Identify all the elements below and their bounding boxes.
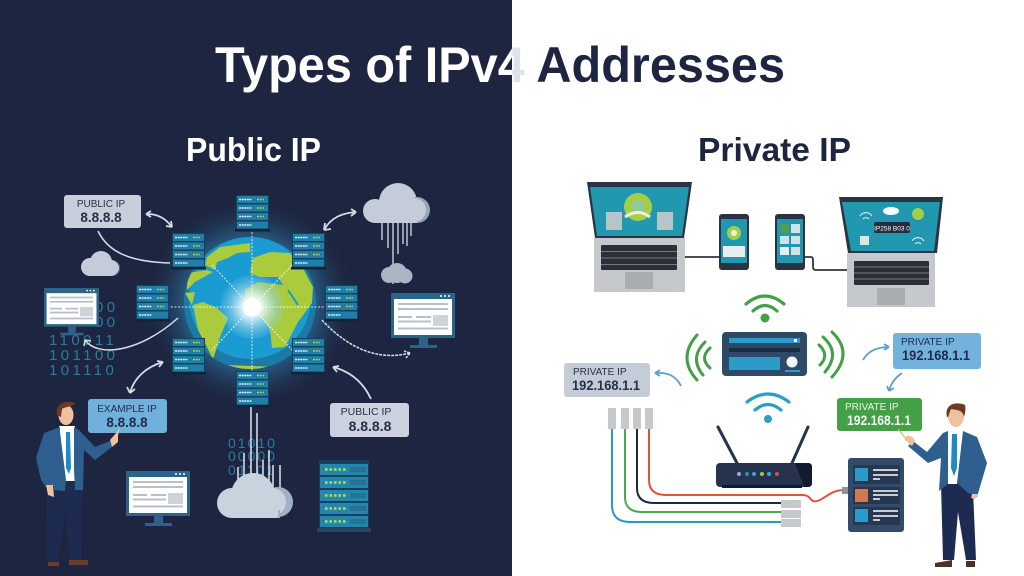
icon: green wifi top (746, 296, 784, 322)
arrow to left callout (655, 370, 681, 386)
callout: public IP lower right: 8.8.8.8 (349, 418, 392, 434)
cable laptop to phone (685, 256, 719, 258)
callout: private IP green: 192.168.1.1 (847, 413, 911, 428)
right panel background (512, 0, 1024, 576)
icon: green signal right (819, 332, 843, 377)
left panel background (0, 0, 512, 576)
callout: private IP blue: 192.168.1.1 (902, 348, 970, 363)
arrow to blue callout (863, 344, 889, 360)
binary digits left: 101100 (49, 347, 118, 364)
callout: private IP blue: PRIVATE IP (901, 337, 955, 348)
globe (184, 237, 316, 372)
wireless router (716, 427, 812, 488)
binary digits bottom: 01010 (228, 435, 277, 451)
icon: green signal left (687, 335, 710, 380)
icon: rain cloud (363, 183, 430, 284)
icon: bottom cloud (217, 473, 293, 518)
callout: private IP left (564, 363, 650, 397)
double arrow to top cloud (324, 209, 356, 230)
panel: public IP network (36, 183, 455, 566)
network rays (136, 232, 360, 372)
phone right (775, 214, 805, 270)
callout: public IP lower right (330, 403, 409, 437)
servers around globe (135, 195, 359, 408)
binary digits left: 00 (95, 314, 118, 331)
icon: monitor bottom (126, 471, 190, 526)
binary digits left: 110011 (49, 332, 117, 349)
person presenting left (36, 402, 120, 566)
data lines into bottom cloud (238, 407, 280, 490)
icon: monitor right (391, 293, 455, 348)
server panel (842, 458, 904, 532)
callout: private IP green: PRIVATE IP (845, 402, 899, 413)
panel: private IP network (564, 182, 987, 567)
callout: example IP (88, 399, 167, 433)
binary digits bottom: 01101 (228, 462, 276, 478)
cable phone to laptop (805, 257, 847, 270)
callout: private IP blue (893, 333, 981, 369)
access point device (722, 332, 807, 376)
callout: public IP top left: 8.8.8.8 (80, 210, 122, 225)
laptop right: IP258 B03 0 (874, 226, 910, 232)
callout: public IP lower right: PUBLIC IP (341, 406, 391, 418)
dashed curve to right monitor (322, 320, 410, 358)
network cables (612, 428, 845, 522)
double arrow to example IP (127, 361, 163, 393)
binary digits left: 00 (95, 299, 118, 316)
callout: example IP: 8.8.8.8 (106, 415, 148, 430)
cable plugs (608, 408, 801, 527)
callout: private IP green (837, 398, 922, 431)
binary digits left: 101110 (49, 362, 117, 379)
double arrow to rack (146, 211, 172, 227)
callout: public IP top left: PUBLIC IP (77, 199, 126, 210)
icon: small cloud (81, 251, 120, 276)
globe glow (142, 195, 358, 411)
binary digits bottom: 00000 (228, 448, 277, 464)
laptop left (587, 182, 692, 292)
callout: public IP top left (64, 195, 141, 228)
person presenting right (898, 403, 987, 567)
icon: monitor left (44, 288, 99, 335)
callout: example IP: EXAMPLE IP (97, 404, 157, 415)
curve from monitor to globe (84, 318, 178, 350)
arrow from public IP callout (333, 366, 371, 399)
icon: blue wifi (747, 394, 789, 423)
icon: small cloud lower (381, 263, 412, 284)
title: Types of IPv4 Addresses (215, 37, 785, 93)
callout: private IP left: PRIVATE IP (573, 367, 627, 378)
callout: private IP left: 192.168.1.1 (572, 378, 640, 393)
server rack bottom (317, 460, 371, 532)
heading: public IP: Public IP (186, 131, 321, 168)
heading: private IP: Private IP (698, 131, 851, 168)
curve from public IP callout (98, 231, 170, 263)
phone left (719, 214, 749, 270)
arrow to green callout (887, 373, 902, 391)
laptop right (839, 197, 943, 307)
